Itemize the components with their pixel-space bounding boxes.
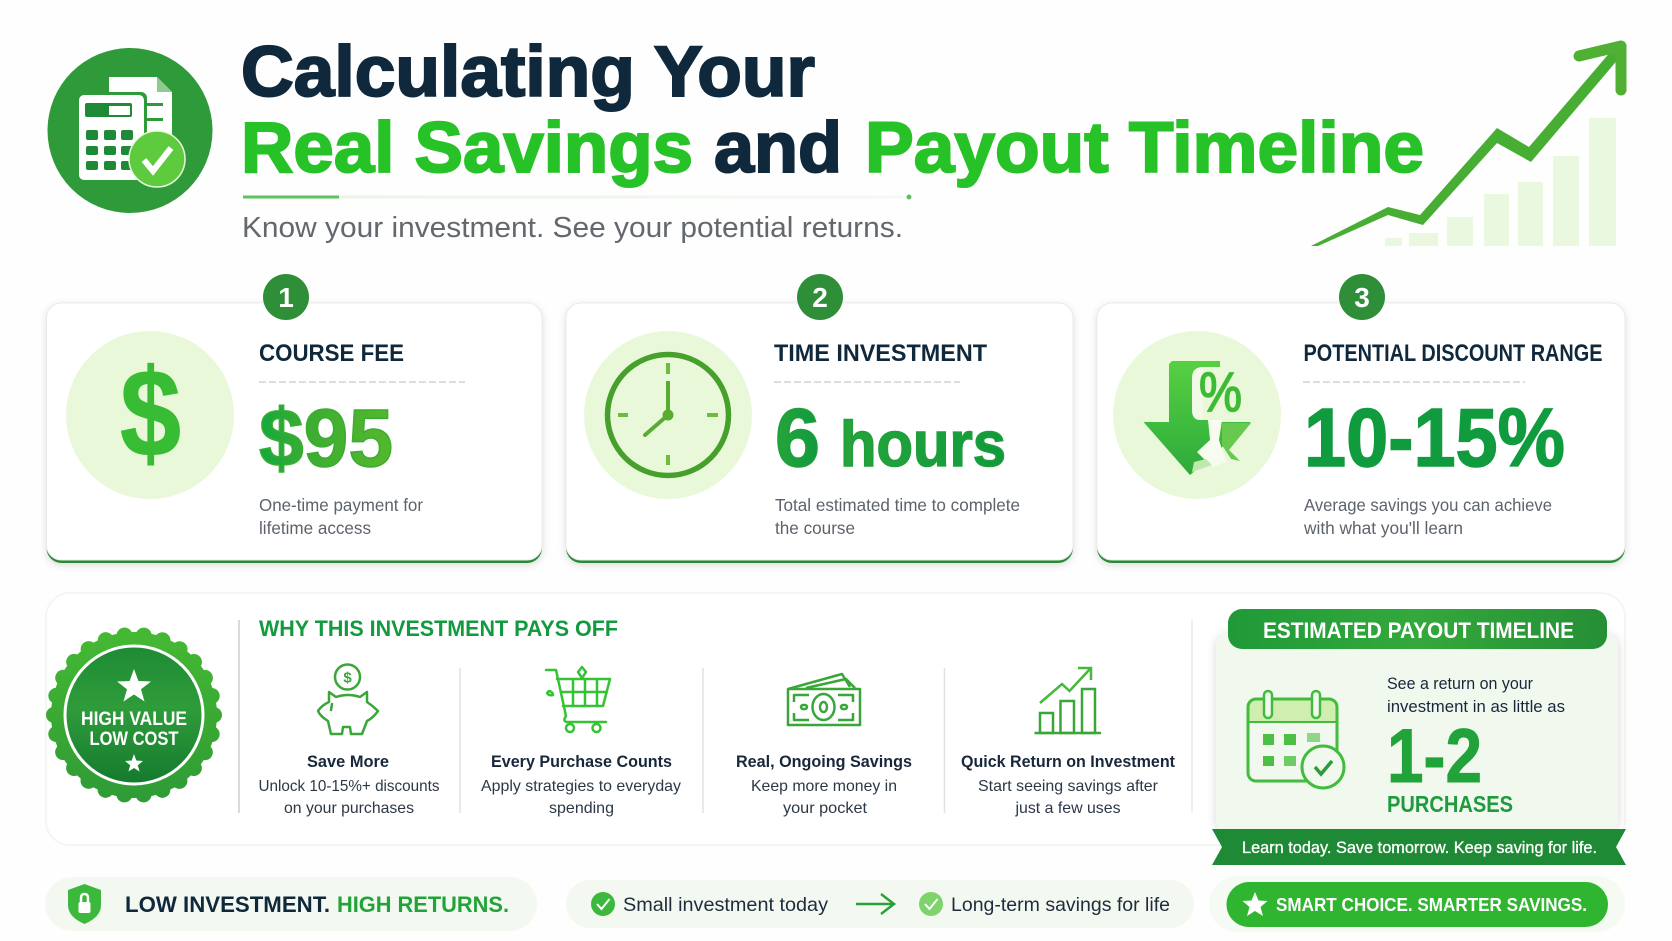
heading: TIME INVESTMENT [774,340,987,367]
badge: high value low cost: LOW COST [90,728,179,750]
chart: growth bars and arrow [1311,46,1621,246]
icon: calendar with check [1248,691,1344,788]
icon: piggy bank [318,664,378,734]
panel: estimated payout timeline: PURCHASES [1387,791,1513,817]
header pill [1228,609,1607,649]
footer button: smart choice: SMART CHOICE. SMARTER SAVINGS. [1276,894,1587,915]
title: Calculating Your [241,33,815,112]
lead text: See a return on your [1387,675,1533,693]
description: One-time payment for [259,495,423,515]
ribbon [1212,829,1626,865]
icon: piggy bank: $ [343,670,352,686]
value: $95 [259,393,393,484]
card 2: time investment [566,274,1073,563]
number badge 2 [797,274,843,320]
item: save more: on your purchases [284,800,414,817]
icon: check [591,892,615,916]
item: real, ongoing savings: your pocket [783,800,868,817]
icon: dollar [66,331,234,499]
icon: cash stack [788,674,860,725]
description [259,495,423,538]
number badge 1: 1 [278,282,294,313]
value [775,391,1006,484]
number badge 3: 3 [1354,282,1370,313]
description: with what you'll learn [1303,518,1463,538]
value: 10-15% [1304,391,1565,484]
panel: estimated payout timeline [1212,609,1626,865]
item: every purchase counts: Apply strategies to everyday [481,778,681,795]
header pill: ESTIMATED PAYOUT TIMELINE [1263,618,1574,643]
ribbon: Learn today. Save tomorrow. Keep saving for life. [1242,839,1597,857]
value: 6 [775,391,820,484]
description [775,495,1020,538]
number badge 2: 2 [812,282,828,313]
footer pill: small investment to long-term savings: Long-term savings for life [951,894,1170,916]
footer pill: small investment to long-term savings: Small investment today [623,894,828,916]
footer pill: low investment high returns [45,877,537,931]
description: Average savings you can achieve [1304,495,1552,515]
title: Real Savings [241,109,693,188]
item: save more: Unlock 10-15%+ discounts [258,778,440,795]
subtitle: Know your investment. See your potential returns. [242,212,903,244]
item: real, ongoing savings [736,674,912,817]
icon: discount arrow: % [1199,360,1242,423]
card 3: potential discount range [1097,274,1625,563]
value: hours [840,408,1006,480]
panel: why this investment pays off [46,593,1625,845]
footer button: smart choice [1209,876,1625,932]
item: every purchase counts: Every Purchase Counts [491,753,672,771]
icon: rising bars [1034,668,1101,733]
lead text [1387,675,1565,716]
item: save more [258,664,440,817]
item: quick return on investment: just a few uses [1015,800,1120,817]
title: and [714,109,842,188]
description: lifetime access [259,518,371,538]
item: quick return on investment: Start seeing savings after [978,778,1159,795]
card 1: course fee [46,274,542,563]
item: every purchase counts [481,667,681,817]
item: real, ongoing savings: Real, Ongoing Savings [736,753,912,771]
number badge 3 [1339,274,1385,320]
item: quick return on investment [961,668,1175,817]
title rule [243,194,912,200]
icon: shopping cart [546,667,610,732]
footer pill: low investment high returns: LOW INVESTMENT. [125,892,330,917]
icon: clock [584,331,752,499]
icon: discount arrow [1113,331,1281,499]
description: the course [775,518,855,538]
item: every purchase counts: spending [549,800,614,817]
icon: star [1242,892,1268,916]
description: Total estimated time to complete [775,495,1020,515]
item: real, ongoing savings: Keep more money in [751,778,897,795]
heading: POTENTIAL DISCOUNT RANGE [1304,340,1602,367]
item: quick return on investment: Quick Return on Investment [961,753,1175,771]
badge: high value low cost [51,632,217,798]
footer pill: small investment to long-term savings [566,880,1194,928]
heading: WHY THIS INVESTMENT PAYS OFF [259,616,618,641]
item: save more: Save More [307,753,389,771]
icon: dollar: $ [120,345,181,483]
badge: high value low cost: HIGH VALUE [81,708,187,730]
description [1303,495,1552,538]
value: 1-2 [1387,714,1482,799]
arrow [856,894,894,914]
footer pill: low investment high returns: HIGH RETURNS. [337,892,509,917]
icon: check light [919,892,943,916]
number badge 1 [263,274,309,320]
heading: COURSE FEE [259,340,404,367]
lead text: investment in as little as [1387,698,1565,716]
title [241,33,1424,188]
icon: calculator with document and check [48,48,212,213]
icon: shield lock [68,884,101,924]
title: Payout Timeline [865,109,1424,188]
